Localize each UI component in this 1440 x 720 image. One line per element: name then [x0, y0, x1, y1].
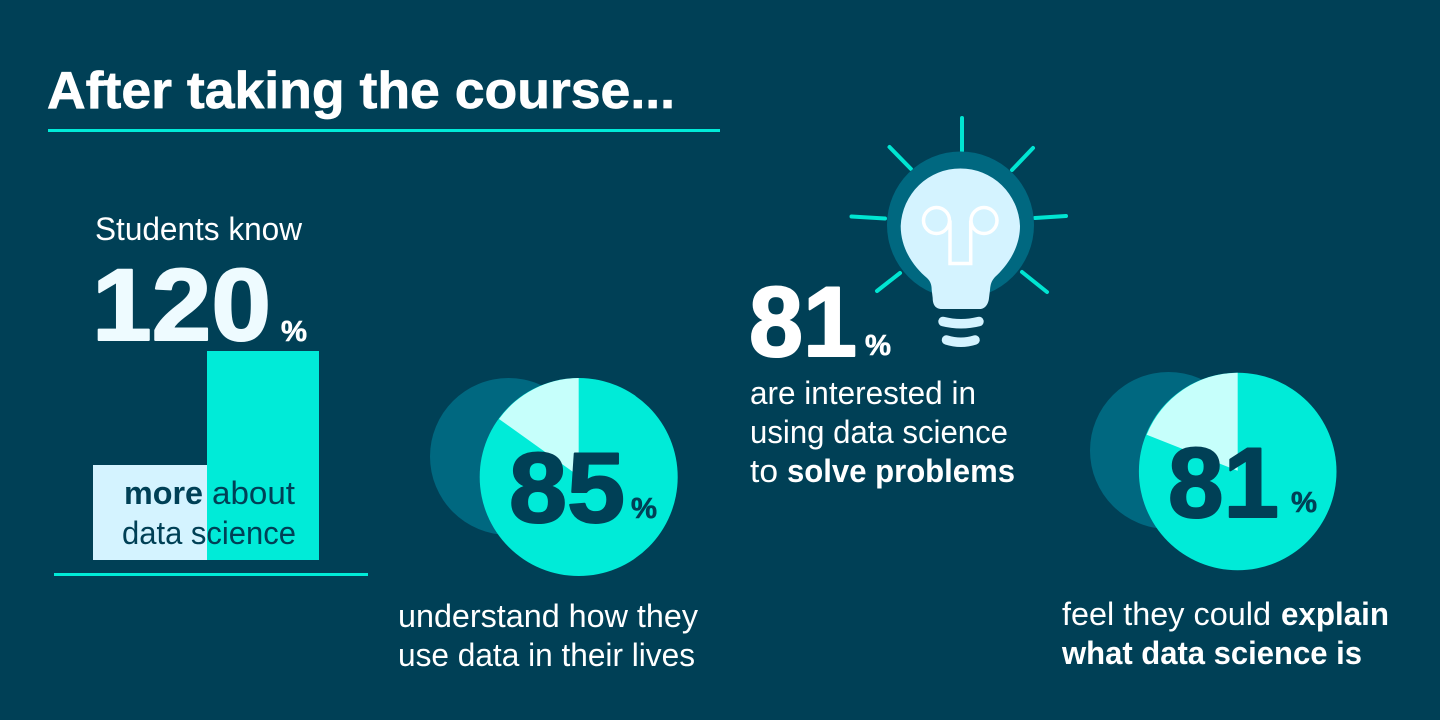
pie chart 85%: [430, 378, 678, 576]
title: After taking the course...: [47, 62, 675, 120]
caption: [398, 598, 698, 673]
bar chart: [54, 351, 368, 576]
panel: 81% explain: [1061, 372, 1389, 671]
panel: 81% interested: [749, 118, 1066, 489]
panel: students know 120% more: [54, 211, 368, 576]
number 81: 81: [1168, 427, 1279, 538]
bar caption: [122, 475, 296, 551]
caption: understand how they: [398, 598, 698, 634]
pie chart 81%: [1090, 372, 1336, 570]
percent sign: %: [1291, 487, 1317, 519]
caption: [750, 375, 1015, 489]
bar caption: about: [212, 475, 295, 511]
caption: feel they could: [1062, 596, 1271, 632]
caption: use data in their lives: [398, 637, 695, 673]
caption: are interested in: [750, 375, 976, 411]
percent sign: %: [631, 493, 657, 525]
caption: [1061, 596, 1389, 671]
panel: 85% understand: [398, 378, 698, 673]
big number 120: 120: [92, 248, 271, 362]
percent sign: %: [281, 316, 307, 348]
bar caption: more: [124, 475, 203, 511]
percent sign: %: [865, 330, 891, 362]
caption: explain: [1281, 596, 1389, 632]
icon: light bulb: [852, 118, 1066, 342]
bar caption: data science: [122, 515, 296, 551]
caption: using data science: [750, 414, 1008, 450]
caption: solve problems: [787, 453, 1015, 489]
caption: to: [750, 453, 778, 489]
number 85: 85: [509, 432, 625, 543]
intro text: Students know: [95, 211, 303, 247]
caption: what data science is: [1061, 635, 1362, 671]
number 81: 81: [749, 266, 857, 377]
